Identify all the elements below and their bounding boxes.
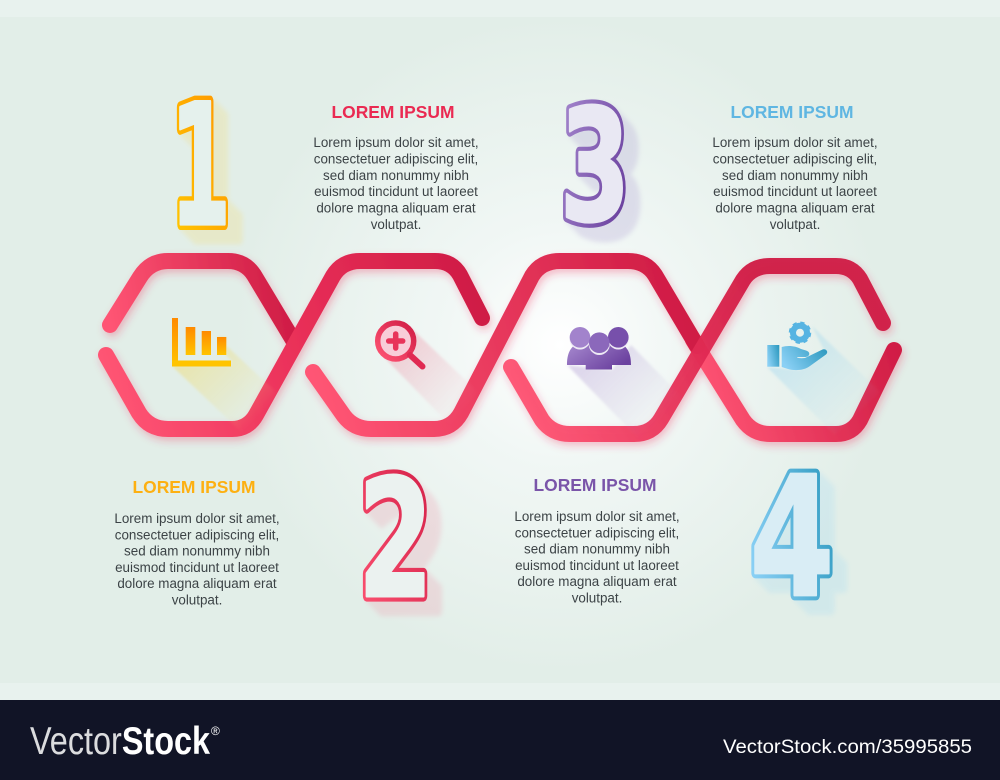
text block: bottom middle: volutpat. [572, 590, 622, 606]
ribbon strand: hexagon 1 bottom to hexagon 2 top [106, 261, 482, 429]
footer logo: VectorStock [30, 720, 210, 763]
text block: bottom middle: dolore magna aliquam erat [517, 574, 677, 589]
text block: bottom left: dolore magna aliquam erat [117, 576, 277, 591]
numeral 4: 4 [750, 442, 834, 635]
numeral 3: 3 [560, 77, 630, 257]
text block: top right: consectetuer adipiscing elit, [713, 152, 877, 166]
text block: bottom left [114, 511, 280, 608]
numeral 2: 2 [358, 445, 433, 635]
ribbon strand: hexagon 2 bottom to hexagon 3 top [313, 261, 697, 429]
text block: bottom left: consectetuer adipiscing elit, [115, 528, 279, 542]
footer band [0, 700, 1000, 780]
heading: top left block: LOREM IPSUM [332, 102, 454, 122]
ribbon strand: hexagon 3 bottom to hexagon 4 top [511, 266, 883, 434]
text block: bottom middle: Lorem ipsum dolor sit amet, [514, 509, 680, 524]
icon: magnifier [378, 323, 478, 425]
text block: bottom left: sed diam nonummy nibh [124, 544, 270, 558]
text block: bottom left: Lorem ipsum dolor sit amet, [114, 511, 280, 526]
icon: people group [567, 327, 690, 440]
text block: bottom middle: consectetuer adipiscing elit, [515, 526, 679, 540]
numeral 1: 1 [170, 68, 231, 264]
text block: top right: dolore magna aliquam erat [715, 200, 875, 216]
text block: bottom middle: euismod tincidunt ut laoreet [515, 558, 679, 573]
text block: top right: sed diam nonummy nibh [722, 168, 868, 183]
text block: top right: euismod tincidunt ut laoreet [713, 184, 877, 199]
text block: top right: Lorem ipsum dolor sit amet, [712, 135, 878, 150]
heading: bottom left block: LOREM IPSUM [132, 477, 256, 497]
text block: bottom left: volutpat. [172, 592, 222, 608]
text block: top left: dolore magna aliquam erat [316, 200, 476, 216]
numeral 2: 2 [358, 445, 433, 635]
text block: top left: consectetuer adipiscing elit, [314, 152, 478, 166]
ribbon strand: hexagon 1 top [110, 261, 293, 340]
ribbon strand: hexagon 3 top right to hexagon 4 bottom [693, 340, 894, 434]
numeral 1: 1 [170, 68, 231, 264]
numeral 3: 3 [560, 77, 630, 257]
numeral 3: 3 [560, 77, 630, 257]
text block: bottom middle: sed diam nonummy nibh [524, 542, 670, 556]
icon: hand holding gear [767, 323, 880, 435]
icon: bar chart [172, 318, 290, 440]
hexagon ribbon [106, 261, 894, 434]
numeral 2: 2 [358, 445, 433, 635]
footer image id: VectorStock.com/35995855 [723, 736, 972, 758]
text block: top right: volutpat. [770, 217, 820, 232]
text block: bottom middle [514, 509, 680, 606]
heading: bottom middle block: LOREM IPSUM [534, 475, 656, 495]
text block: top left: volutpat. [371, 217, 421, 232]
numeral 4: 4 [750, 442, 834, 635]
text block: top left [313, 135, 479, 232]
numeral 4: 4 [750, 442, 834, 635]
text block: bottom left: euismod tincidunt ut laoreet [115, 560, 279, 575]
text block: top left: sed diam nonummy nibh [323, 168, 469, 183]
heading: top right block: LOREM IPSUM [730, 102, 854, 122]
text block: top left: Lorem ipsum dolor sit amet, [313, 135, 479, 150]
numeral 1: 1 [170, 68, 231, 264]
text block: top left: euismod tincidunt ut laoreet [314, 184, 478, 199]
text block: top right [712, 135, 878, 232]
registered mark: ® [211, 724, 220, 738]
